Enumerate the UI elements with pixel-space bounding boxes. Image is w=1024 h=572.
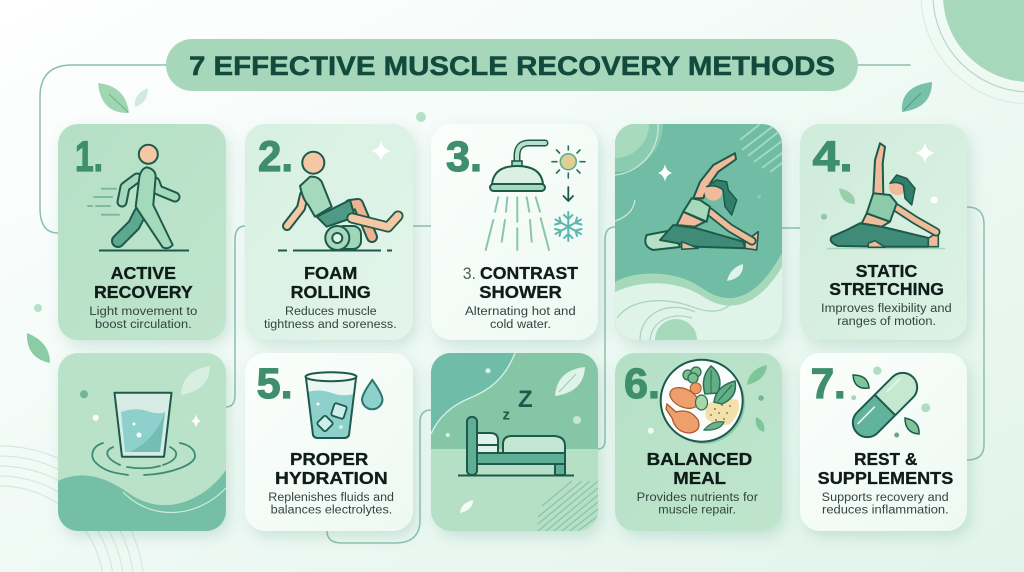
icon: snowflake: [555, 212, 582, 241]
panel: 3 contrast shower: cold water.: [490, 319, 551, 331]
description: Light movement to: [89, 306, 197, 318]
icon: person on foam roller: [278, 152, 398, 250]
description: Improves flexibility and: [821, 303, 952, 315]
panel: 6 balanced meal: [615, 353, 782, 531]
leaves and dots: [851, 366, 930, 438]
icon: glass with ice: [305, 372, 358, 440]
icon: glass of water: [114, 393, 172, 457]
heading: PROPER: [290, 449, 369, 469]
title banner: [166, 39, 858, 91]
heading: 3.: [463, 264, 476, 283]
title text: 7 EFFECTIVE MUSCLE RECOVERY METHODS: [189, 51, 835, 81]
sparkles and leaf: [80, 366, 210, 428]
decorations: [821, 142, 945, 248]
sleep symbols: z: [502, 406, 510, 424]
panel: 3 contrast shower: SHOWER: [479, 282, 562, 302]
number 2: 2.: [258, 133, 293, 181]
number 1: 1.: [75, 133, 103, 181]
panel: 5 proper hydration: balances electrolytes.: [271, 504, 392, 516]
connector lines: [40, 65, 984, 543]
panel: 3 contrast shower: [431, 124, 598, 340]
description: Alternating hot and: [465, 306, 576, 318]
icon: plate of food: [661, 360, 745, 444]
panel: 7 rest and supplements: [800, 353, 967, 531]
panel: stretching illustration: [615, 124, 786, 340]
leaves and dots: [648, 365, 767, 434]
heading: BALANCED: [647, 449, 752, 469]
panel: 1 active recovery: RECOVERY: [94, 282, 193, 302]
description: Replenishes fluids and: [268, 492, 394, 504]
panel: 2 foam rolling: [245, 124, 413, 340]
icon: bed: [458, 417, 574, 476]
panel: 4 static stretching: STRETCHING: [829, 279, 944, 299]
icon: walking person: [88, 145, 189, 250]
heading: ACTIVE: [111, 263, 176, 283]
description: Provides nutrients for: [637, 492, 758, 504]
icon: water ripples: [92, 443, 195, 475]
panel: 6 balanced meal: MEAL: [673, 468, 726, 488]
sparkle: [658, 164, 672, 182]
description: Supports recovery and: [822, 492, 949, 504]
leaves and dots: [446, 367, 585, 513]
dot: [757, 195, 761, 199]
panel: 1 active recovery: boost circulation.: [95, 319, 192, 331]
number 3: 3.: [446, 133, 482, 181]
heading: FOAM: [304, 263, 357, 283]
number 5: 5.: [257, 360, 293, 408]
icon: seated side stretch figure: [645, 153, 758, 250]
icon: water drop: [362, 380, 382, 409]
decoration: top-right circle with rings: [921, 0, 1024, 104]
heading: STATIC: [856, 261, 918, 281]
panel: 1 active recovery: [58, 124, 226, 340]
panel: sleep illustration: [431, 353, 598, 531]
panel: 2 foam rolling: tightness and soreness.: [264, 319, 397, 331]
icon: sun: [552, 146, 585, 178]
panel: water glass illustration: [58, 353, 226, 531]
panel: 2 foam rolling: ROLLING: [291, 282, 371, 302]
panel: 4 static stretching: [800, 124, 967, 340]
panel: 7 rest and supplements: reduces inflammation.: [822, 504, 949, 516]
panel: 6 balanced meal: muscle repair.: [658, 504, 736, 516]
sleep symbols: [502, 386, 533, 424]
icon: seated reach figure: [831, 143, 938, 247]
number 4: 4.: [813, 133, 853, 181]
arrow: hot to cold: [564, 187, 573, 201]
heading: REST &: [854, 449, 918, 469]
panel: 5 proper hydration: HYDRATION: [275, 468, 388, 488]
description: Reduces muscle: [285, 306, 377, 318]
sparkle: [371, 140, 391, 162]
icon: shower head: [486, 143, 549, 250]
decorative leaves and dots: [27, 82, 932, 363]
icon: capsule: [847, 367, 923, 443]
panel: 3 contrast shower: CONTRAST: [480, 263, 578, 283]
panel: 7 rest and supplements: SUPPLEMENTS: [818, 468, 953, 488]
decoration: bottom-left contour arcs: [0, 446, 143, 572]
sleep symbols: Z: [518, 386, 533, 413]
number 7: 7.: [811, 360, 846, 408]
number 6: 6.: [624, 360, 660, 408]
panel: 4 static stretching: ranges of motion.: [837, 316, 936, 328]
panel: 5 proper hydration: [245, 353, 413, 531]
